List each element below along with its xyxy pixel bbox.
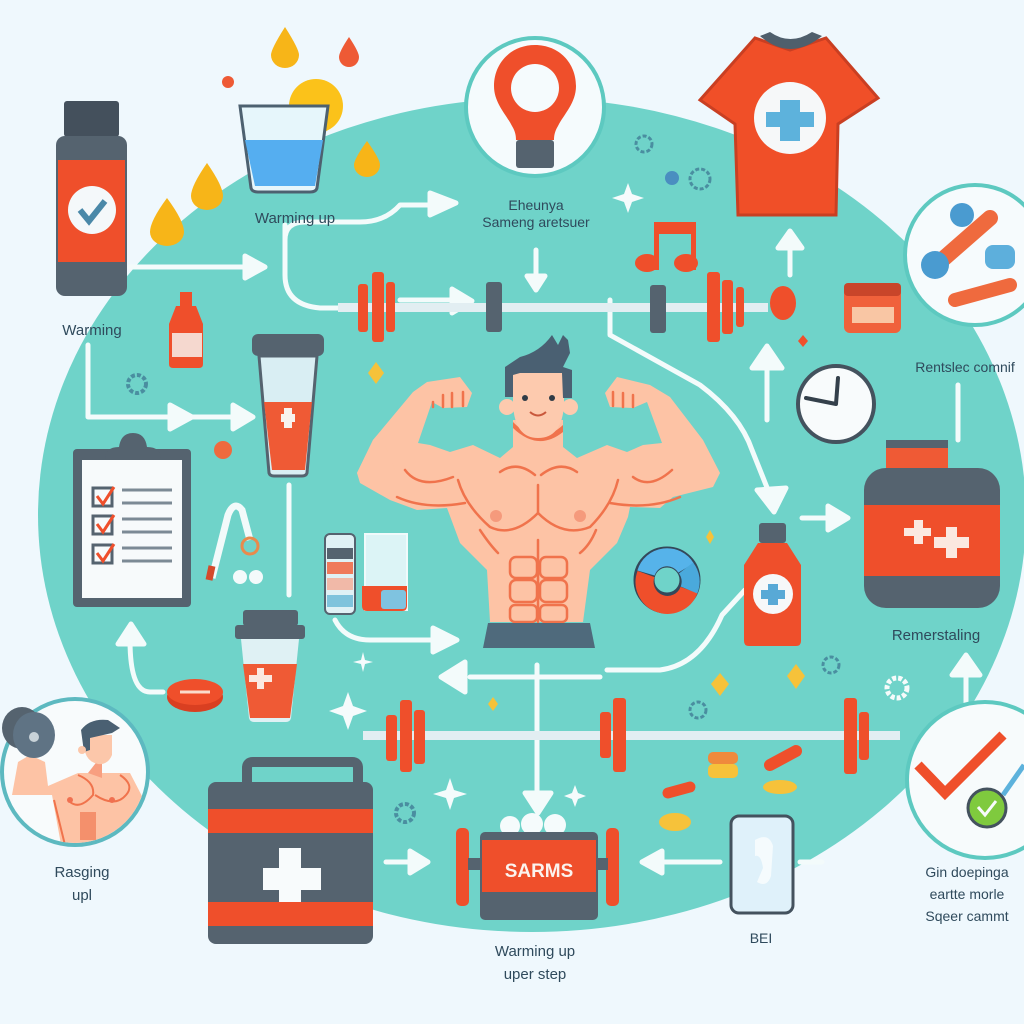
- icon: small medicine bottle: [169, 292, 203, 368]
- icon: takeaway shaker: [235, 610, 305, 722]
- text: Rentslec comnif: Rentslec comnif: [915, 359, 1015, 375]
- top barbell: [338, 272, 768, 342]
- icon: SARMS barbell product: [456, 813, 619, 920]
- text: Warming: Warming: [62, 322, 122, 339]
- icon: man lifting dumbbell circle: [2, 699, 148, 850]
- icon: music note: [635, 222, 698, 272]
- arrows: [88, 193, 980, 873]
- icon: pill organiser and glass: [325, 534, 407, 614]
- icon: supplement bottle with check: [56, 101, 127, 296]
- icon: first aid kit: [208, 762, 373, 944]
- icon: water glass with drops and sun: [150, 27, 380, 246]
- icon: clock: [798, 366, 874, 442]
- text: bulb caption: Eheunya: [508, 197, 564, 213]
- small capsules and sparkles: [128, 136, 907, 831]
- text: Rasging upl: Rasging: [54, 864, 110, 881]
- text: Warming up upper step: Warming up: [495, 943, 575, 960]
- icon: clipboard checklist: [73, 433, 191, 607]
- text: right caption: eartte morle: [930, 886, 1005, 902]
- icon: ring gauge: [644, 557, 691, 605]
- text: right caption: Gin doepinga: [925, 864, 1009, 880]
- text: bulb caption: Sameng aretsuer: [482, 214, 590, 230]
- teal background circle: [38, 98, 1024, 932]
- icon: red T-shirt with cross: [700, 32, 878, 215]
- text: right caption: Sqeer cammt: [925, 908, 1009, 924]
- bottom barbell: [363, 698, 900, 774]
- icon: phone: [731, 816, 793, 913]
- text: Warming up: Warming up: [255, 210, 335, 227]
- icon: light bulb in circle: [466, 38, 604, 176]
- text: Rasging upl: upl: [72, 887, 92, 904]
- icon: small capsule and jar: [770, 283, 901, 333]
- icon: dumbbells circle: [905, 185, 1024, 325]
- central muscular figure: [357, 335, 720, 648]
- icon: shaker cup: [252, 334, 324, 476]
- text: Remerstaling: Remerstaling: [892, 627, 980, 644]
- icon: SARMS barbell product: SARMS: [505, 861, 573, 882]
- icon: red bottle: [744, 523, 801, 646]
- icon: large supplement jar: [864, 440, 1000, 608]
- text: BEI: BEI: [750, 930, 772, 946]
- icon: resistance band and pills: [209, 506, 263, 584]
- text: Warming up upper step: uper step: [504, 966, 566, 983]
- icon: check mark circle: [907, 702, 1024, 858]
- icon: weight plate: [167, 679, 223, 712]
